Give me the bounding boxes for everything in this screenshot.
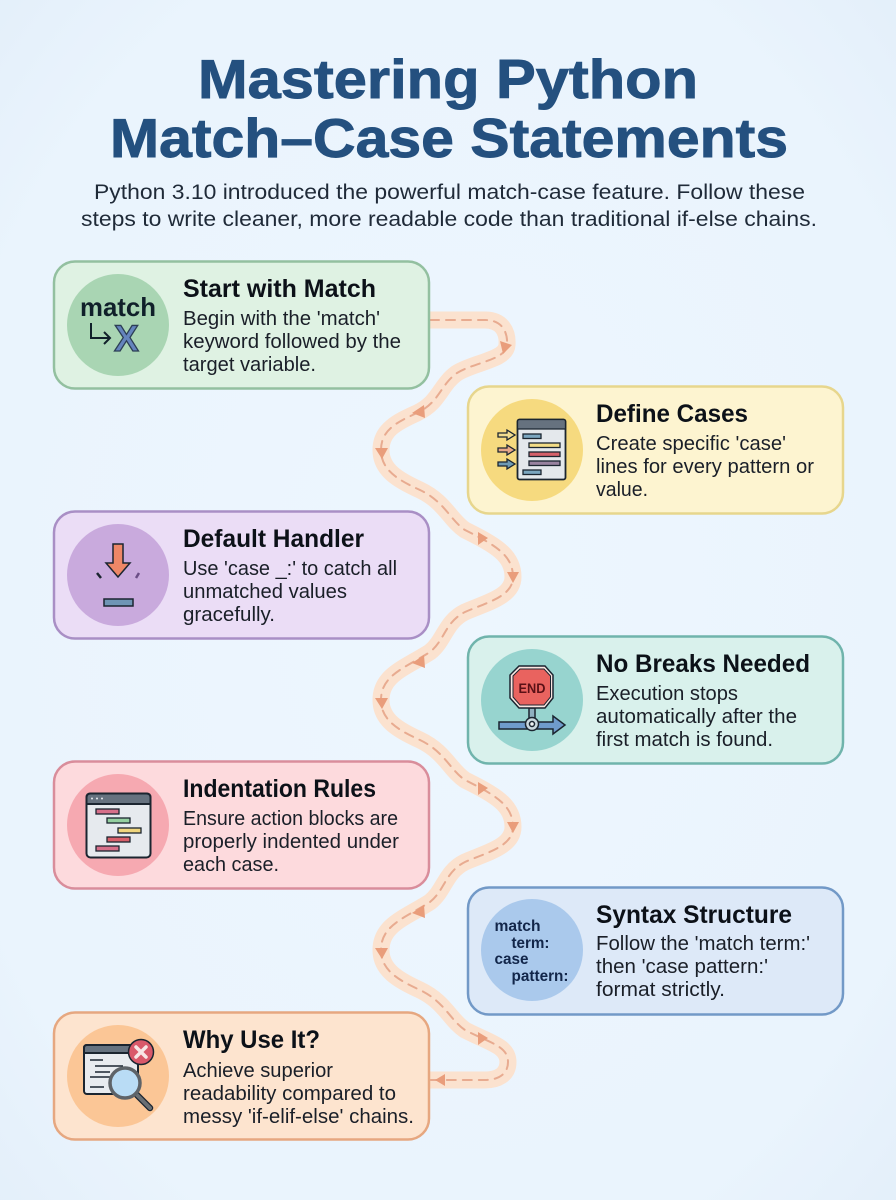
heading: Default Handler bbox=[183, 525, 364, 553]
description bbox=[183, 808, 399, 876]
description: then 'case pattern:' bbox=[596, 956, 768, 978]
description: gracefully. bbox=[183, 604, 275, 626]
panel: Indentation Rules bbox=[54, 762, 429, 888]
panel: Define Cases bbox=[468, 386, 843, 514]
icon: code window with magnifier and error badge bbox=[84, 1040, 154, 1108]
title: Match–Case Statements bbox=[110, 107, 788, 169]
subtitle bbox=[81, 181, 817, 231]
panel: Syntax Structure bbox=[468, 888, 843, 1014]
icon: match-case syntax text: term: bbox=[512, 935, 550, 952]
description: Execution stops bbox=[596, 683, 738, 705]
description: messy 'if-elif-else' chains. bbox=[183, 1106, 414, 1128]
heading: Start with Match bbox=[183, 275, 376, 303]
description: Begin with the 'match' bbox=[183, 308, 380, 330]
panel: Default Handler bbox=[54, 512, 429, 638]
panel: No Breaks Needed bbox=[468, 636, 843, 764]
icon: END stop sign on arrow bbox=[499, 666, 565, 734]
heading: Define Cases bbox=[596, 400, 748, 428]
subtitle: steps to write cleaner, more readable code than traditional if-else chains. bbox=[81, 208, 817, 231]
icon: down arrow to default bar bbox=[97, 544, 139, 606]
description: lines for every pattern or bbox=[596, 456, 814, 478]
icon: match-case syntax text: case bbox=[494, 951, 529, 968]
description: Follow the 'match term:' bbox=[596, 933, 810, 955]
description: Ensure action blocks are bbox=[183, 808, 398, 830]
heading: Why Use It? bbox=[183, 1026, 320, 1054]
description: properly indented under bbox=[183, 831, 399, 853]
description: Achieve superior bbox=[183, 1060, 333, 1082]
description: Use 'case _:' to catch all bbox=[183, 558, 397, 580]
panel: Start with Match bbox=[54, 262, 429, 388]
description: each case. bbox=[183, 854, 279, 876]
heading: Indentation Rules bbox=[183, 775, 376, 803]
heading: Syntax Structure bbox=[596, 901, 792, 929]
description: Create specific 'case' bbox=[596, 433, 786, 455]
description: keyword followed by the bbox=[183, 331, 401, 353]
description: target variable. bbox=[183, 354, 316, 376]
description: unmatched values bbox=[183, 581, 347, 603]
description: first match is found. bbox=[596, 729, 773, 751]
icon: match keyword with arrow to x bbox=[80, 292, 156, 359]
icon: match keyword with arrow to x: X bbox=[114, 318, 139, 359]
description bbox=[183, 558, 397, 626]
heading: No Breaks Needed bbox=[596, 650, 810, 678]
description bbox=[596, 433, 814, 501]
description bbox=[596, 683, 797, 751]
description bbox=[596, 933, 810, 1001]
subtitle: Python 3.10 introduced the powerful match-case feature. Follow these bbox=[94, 181, 805, 204]
title: Mastering Python bbox=[198, 48, 698, 110]
icon: code window with case arrows bbox=[498, 420, 566, 480]
title bbox=[110, 48, 788, 169]
description: automatically after the bbox=[596, 706, 797, 728]
icon: match-case syntax text: pattern: bbox=[512, 968, 568, 985]
description bbox=[183, 308, 401, 376]
icon: match keyword with arrow to x: match bbox=[80, 292, 156, 322]
icon: match-case syntax text: match bbox=[494, 918, 540, 935]
winding connector path bbox=[375, 320, 519, 1086]
description: value. bbox=[596, 479, 648, 501]
description: format strictly. bbox=[596, 979, 725, 1001]
icon: indented code window bbox=[86, 794, 150, 858]
icon: END stop sign on arrow: END bbox=[518, 680, 546, 696]
description: readability compared to bbox=[183, 1083, 396, 1105]
description bbox=[183, 1060, 414, 1128]
icon: match-case syntax text bbox=[494, 918, 568, 985]
panel: Why Use It? bbox=[54, 1012, 429, 1140]
